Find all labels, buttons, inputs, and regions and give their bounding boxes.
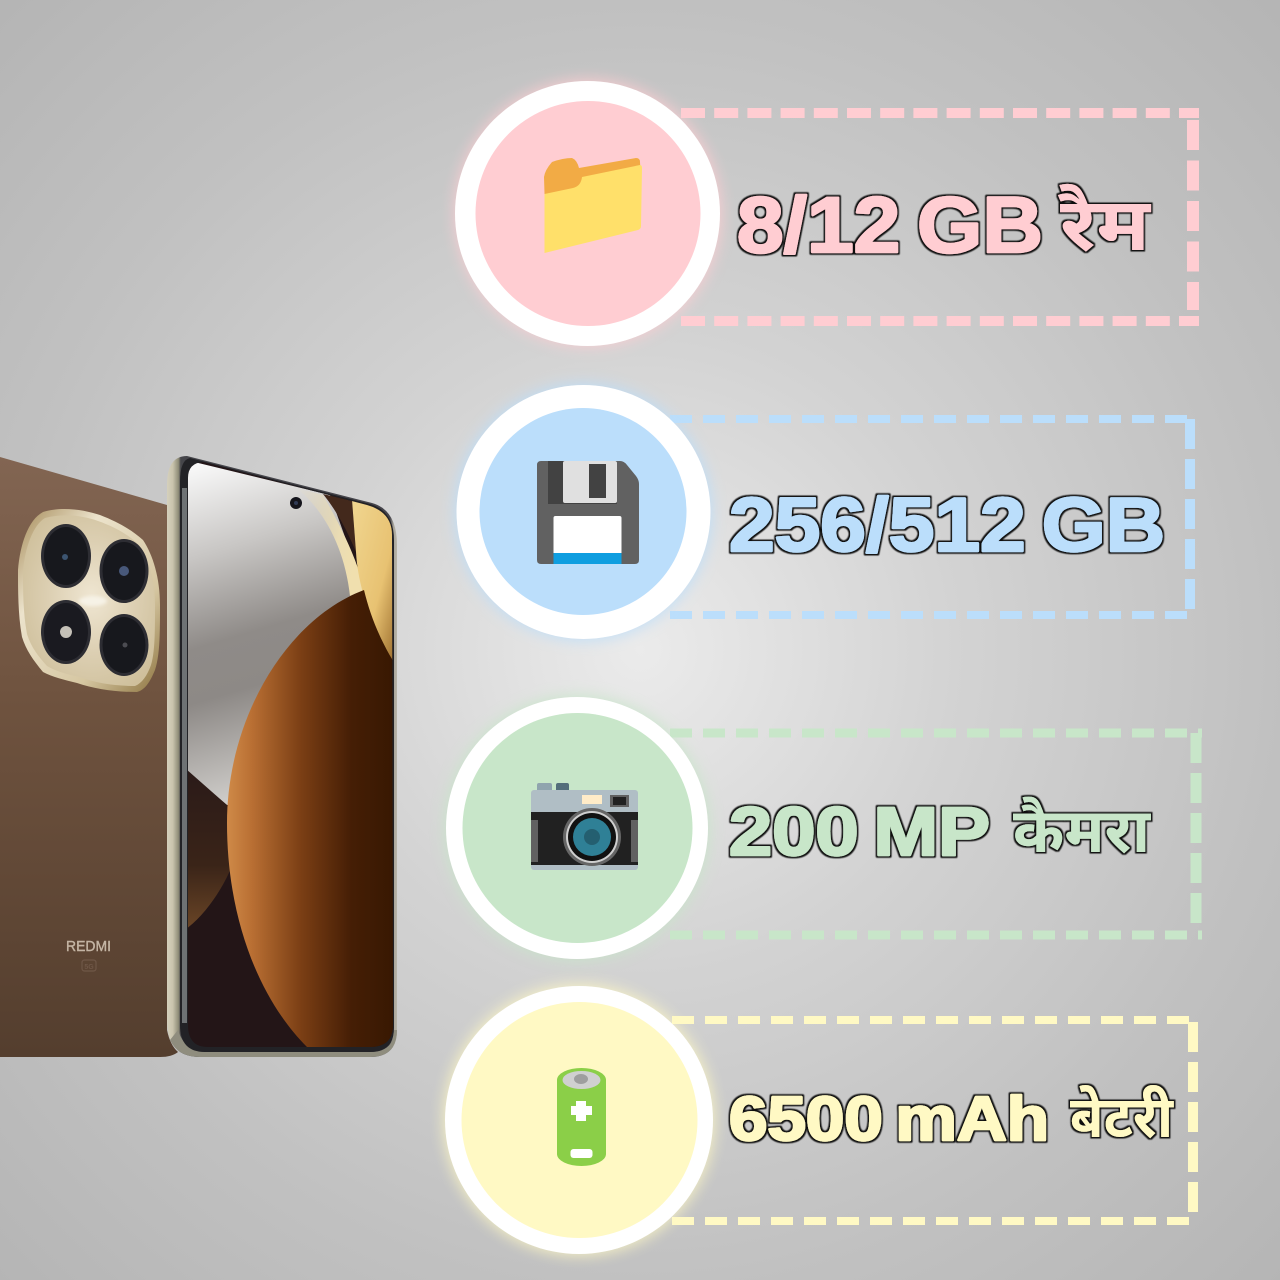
label: 8/12 GB RAM: रैम: [1058, 183, 1152, 266]
5G badge: 5G: [84, 964, 94, 971]
rear lens 1: [41, 524, 91, 588]
icon: folder: [544, 158, 642, 253]
label: 6500 mAh battery: 6500 mAh: [729, 1085, 1049, 1154]
selfie camera: [290, 497, 302, 509]
label: 6500 mAh battery: बेटरी: [1070, 1085, 1174, 1150]
metal frame: [167, 456, 397, 1057]
circle badge: storage: [454, 383, 712, 641]
label: 6500 mAh battery: [729, 1085, 1174, 1154]
phone back panel: [0, 457, 178, 1057]
phone front: [167, 456, 397, 1057]
screen wallpaper: [186, 460, 396, 1050]
circle badge: RAM: [454, 79, 722, 347]
center logo sheen: [79, 596, 107, 606]
rear lens 2: [100, 539, 148, 603]
camera island: [18, 509, 160, 692]
circle badge: battery: [443, 984, 715, 1256]
panel: storage: [454, 383, 1190, 641]
5G badge: [82, 960, 96, 971]
label: 200 MP camera: कैमरा: [1013, 795, 1152, 866]
rear lens 3 flash: [41, 600, 91, 664]
label: 200 MP camera: [729, 793, 1152, 870]
rear lens 4: [100, 614, 148, 676]
circle badge: camera: [444, 695, 710, 961]
label: 200 MP camera: 200 MP: [729, 793, 990, 870]
phone product image: [0, 456, 397, 1057]
panel: battery: [443, 984, 1198, 1256]
dashed frame: storage: [670, 419, 1190, 615]
brand text REDMI: REDMI: [66, 938, 111, 955]
panel: RAM: [454, 79, 1199, 347]
icon: battery: [557, 1068, 606, 1166]
dashed frame: RAM: [681, 113, 1199, 321]
dashed frame: camera: [670, 733, 1202, 935]
label: 256/512 GB: 256/512 GB: [729, 483, 1165, 568]
label: 8/12 GB RAM: 8/12 GB: [737, 180, 1043, 269]
icon: floppy disk: [537, 461, 639, 564]
label: 8/12 GB RAM: [737, 180, 1152, 269]
icon: camera: [531, 783, 638, 870]
dashed frame: battery: [672, 1020, 1198, 1222]
panel: camera: [444, 695, 1202, 961]
